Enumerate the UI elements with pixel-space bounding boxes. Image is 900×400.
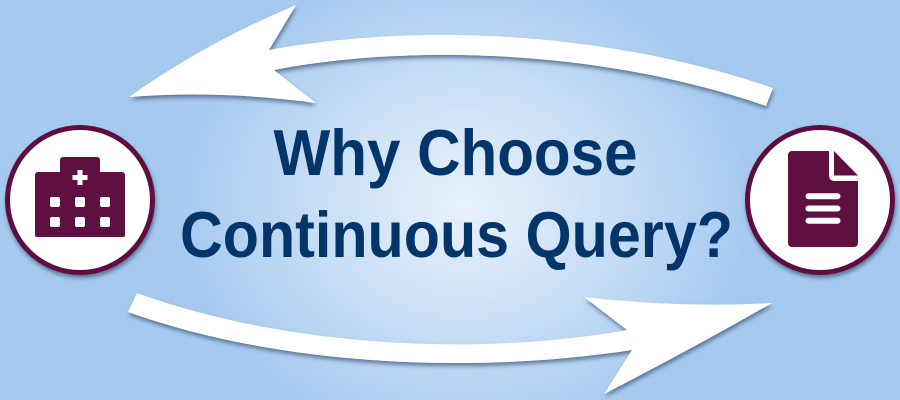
arrow: bottom, pointing right: [128, 293, 772, 394]
title line 1: Why Choose: [274, 116, 638, 189]
hospital circle: [8, 128, 152, 272]
icon: hospital: [8, 128, 152, 272]
document lines: [806, 193, 840, 224]
hospital cross: [72, 170, 88, 185]
title line 2: Continuous Query?: [180, 198, 733, 271]
title: [180, 116, 733, 271]
document circle: [748, 128, 892, 272]
document corner fold: [834, 151, 858, 176]
icon: document: [748, 128, 892, 272]
document page: [788, 151, 858, 247]
arrow: top, pointing left: [129, 5, 773, 106]
hospital building: [35, 157, 125, 237]
hospital windows: [50, 197, 110, 227]
